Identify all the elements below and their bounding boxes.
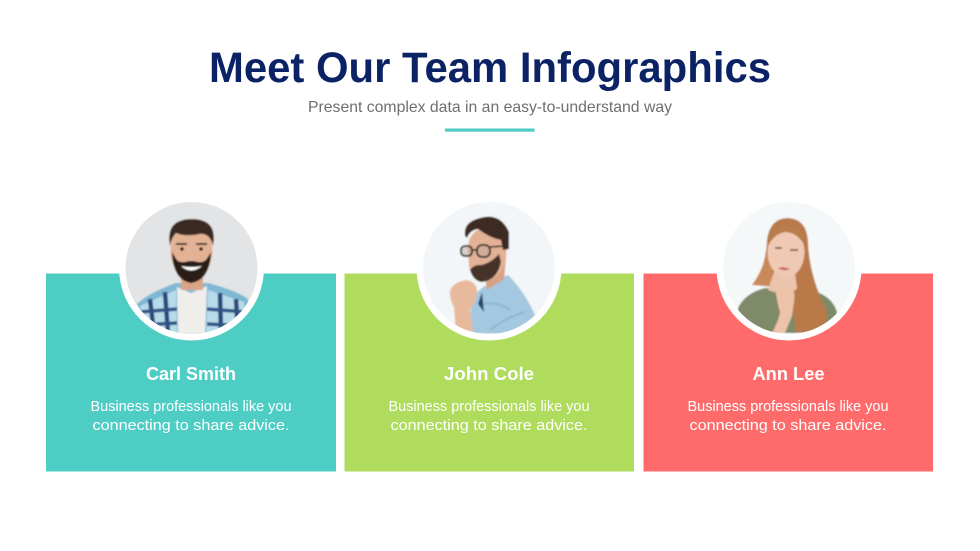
portrait: Ann Lee (723, 202, 855, 334)
panel: Ann Lee (644, 196, 933, 472)
photo ring (716, 196, 862, 340)
description: connecting to share advice. (690, 417, 886, 434)
name: Ann Lee (752, 363, 824, 384)
description: connecting to share advice. (390, 417, 588, 434)
title: Meet Our Team Infographics (209, 44, 771, 92)
description: Business professionals like you (90, 398, 292, 415)
photo ring (119, 196, 264, 340)
panel: John Cole (344, 196, 634, 472)
card background: coral (644, 274, 933, 472)
card background: green (344, 274, 634, 472)
card background: teal (46, 274, 336, 472)
name: Carl Smith (146, 363, 236, 384)
description: Business professionals like you (688, 398, 888, 415)
photo ring (416, 196, 562, 340)
title underline accent (445, 128, 534, 132)
subtitle: Present complex data in an easy-to-understand way (308, 99, 672, 116)
description: connecting to share advice. (92, 417, 290, 434)
portrait: Carl Smith (126, 202, 258, 334)
name: John Cole (444, 363, 534, 384)
description: Business professionals like you (388, 398, 590, 415)
panel: Carl Smith (46, 196, 336, 472)
portrait: John Cole (423, 202, 555, 334)
